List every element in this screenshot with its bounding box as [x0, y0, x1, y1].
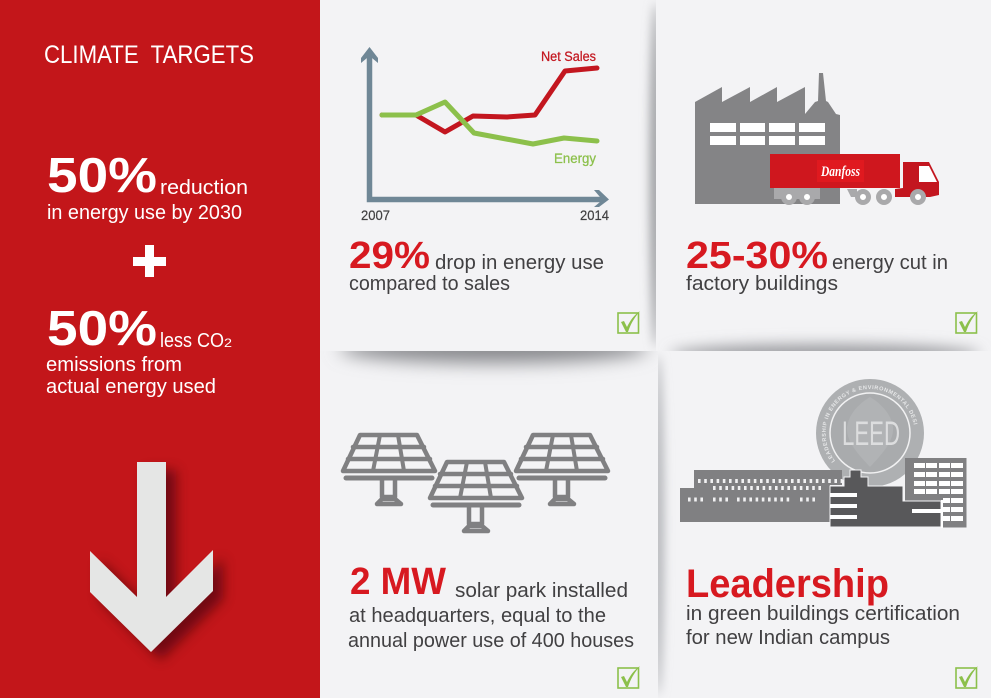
target two: 50% less CO2: [46, 302, 232, 398]
front dark building: [830, 470, 943, 528]
solar panel middle: [430, 462, 522, 531]
seal leaf: [847, 397, 893, 467]
text: leadership: Leadership: [686, 562, 889, 606]
icon: check box: [956, 666, 978, 688]
text: 29% drop: drop in energy use: [435, 252, 604, 274]
long building: [680, 470, 842, 522]
panel: factory buildings: [686, 73, 978, 333]
solar panel right: [516, 435, 608, 504]
plus sign: [133, 245, 166, 277]
icon: solar panels: [343, 435, 608, 531]
icon: down arrow: [90, 462, 223, 660]
icon: campus buildings: [680, 458, 966, 528]
icon: truck: [770, 154, 939, 202]
icon: leed seal: [816, 379, 924, 486]
text: 25-30% energy cut: factory buildings: [686, 273, 838, 295]
icon: factory: [695, 73, 840, 204]
text: leadership: [686, 562, 960, 649]
label: 2014: 2014: [580, 208, 609, 223]
icon: check box: [956, 311, 978, 333]
text: 2 MW solar park: at headquarters, equal to the: [349, 605, 606, 627]
target two: 50% less CO2: emissions from: [46, 353, 182, 376]
text: 29% drop: 29%: [349, 235, 430, 277]
text: 25-30% energy cut: 25-30%: [686, 235, 828, 277]
text: leadership: in green buildings certification: [686, 603, 960, 625]
panel: solar park: [343, 435, 640, 688]
seal ring text: LEADERSHIP IN ENERGY & ENVIRONMENTAL DESIGN: [822, 385, 918, 463]
seal name: LEED: [842, 415, 900, 453]
target two: 50% less CO2: 2: [224, 336, 232, 350]
panel: climate targets: [0, 0, 320, 698]
line chart: [361, 47, 609, 223]
target two: 50% less CO2: 50%: [47, 302, 157, 356]
label: net sales: Net Sales: [541, 49, 596, 64]
target one: 50% reduction: 50%: [47, 149, 157, 203]
text: 2 MW solar park: [348, 561, 634, 652]
heading: climate targets: CLIMATE TARGETS: [44, 41, 254, 69]
text: leadership: for new Indian campus: [686, 627, 890, 649]
solar panel left: [343, 435, 435, 504]
panel shadows: [339, 3, 980, 695]
energy line: [382, 102, 597, 144]
label: energy: Energy: [554, 151, 596, 166]
target one: 50% reduction: [47, 149, 248, 224]
panel: energy vs sales chart: [349, 47, 640, 333]
text: 29% drop: compared to sales: [349, 273, 510, 295]
truck logo: Danfoss: [820, 164, 860, 180]
chart axes: [361, 47, 609, 207]
text: 29% drop: [349, 235, 604, 295]
icon: check box: [618, 311, 640, 333]
icon: check box: [618, 666, 640, 688]
factory windows: [710, 123, 825, 145]
target one: 50% reduction: reduction: [160, 176, 248, 199]
target one: 50% reduction: in energy use by 2030: [47, 201, 242, 224]
text: 2 MW solar park: 2 MW: [350, 561, 446, 603]
label: 2007: 2007: [361, 208, 390, 223]
tower block: [905, 458, 966, 528]
text: 2 MW solar park: annual power use of 400 houses: [348, 630, 634, 652]
text: 25-30% energy cut: [686, 235, 948, 295]
net sales line: [382, 68, 597, 132]
text: 25-30% energy cut: energy cut in: [832, 252, 948, 274]
target two: 50% less CO2: actual energy used: [46, 375, 216, 398]
target two: 50% less CO2: less CO: [160, 329, 224, 352]
truck wheels: [784, 192, 924, 202]
text: 2 MW solar park: solar park installed: [455, 580, 628, 602]
